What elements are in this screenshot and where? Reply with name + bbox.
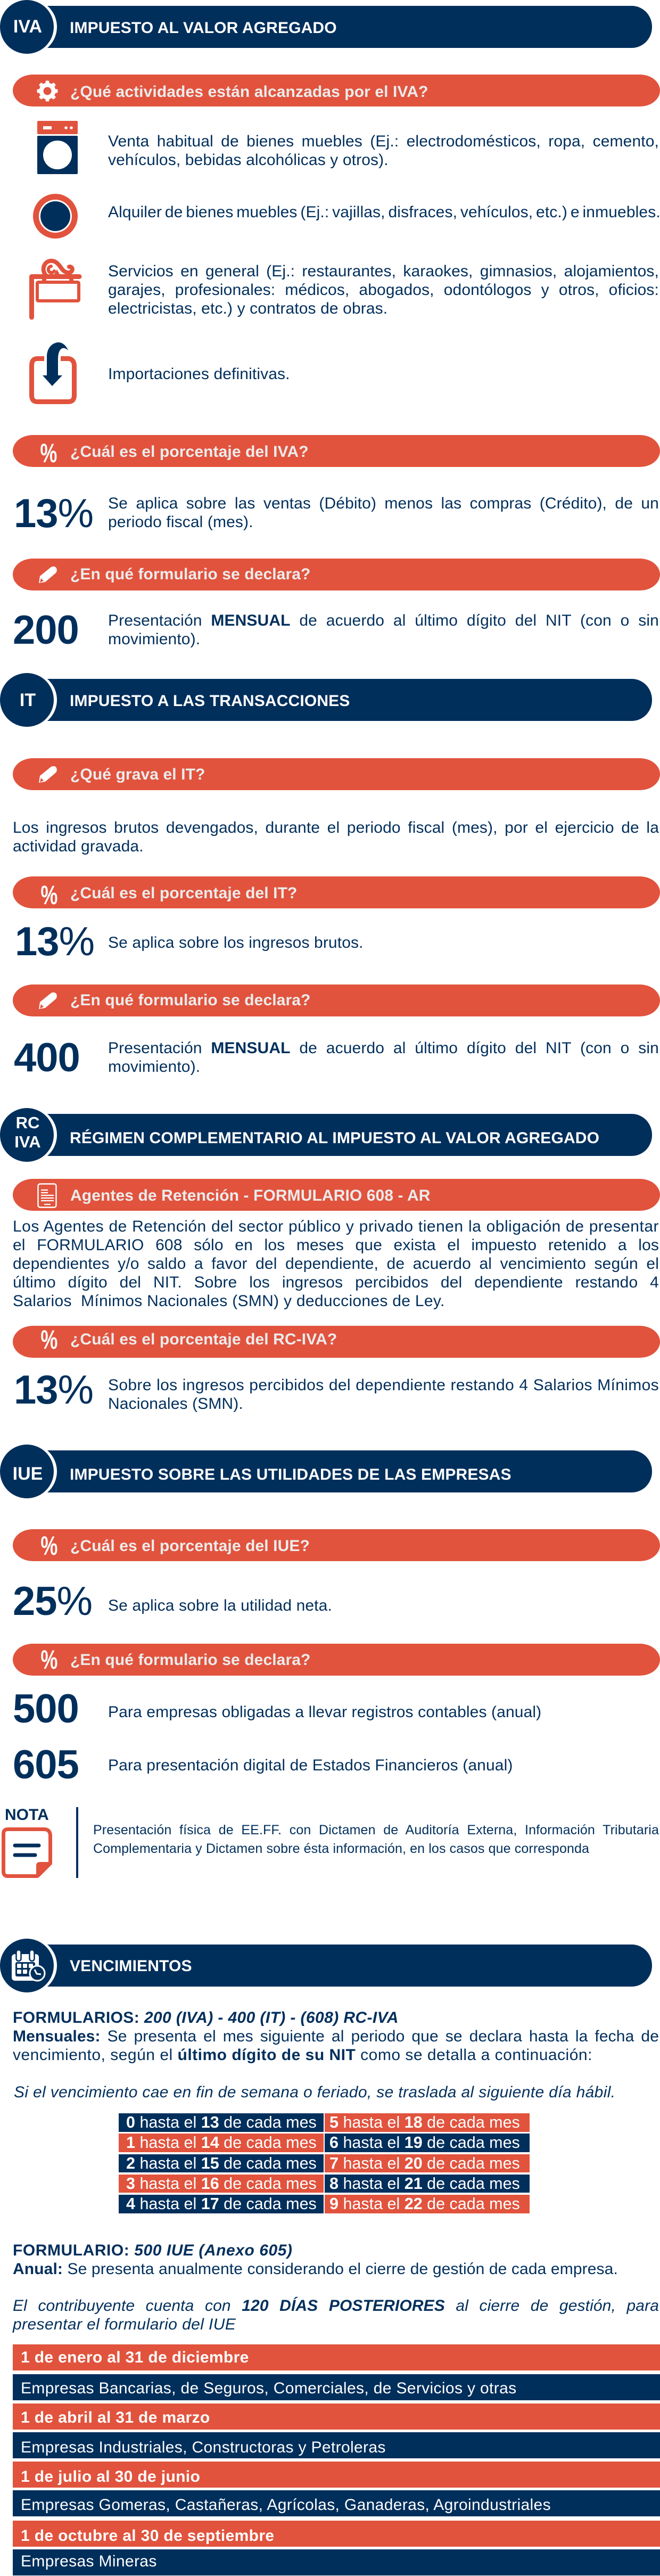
pill text: ¿Cuál es el porcentaje del IUE? (70, 1537, 310, 1555)
pill text: ¿En qué formulario se declara? (70, 1651, 310, 1669)
text: servicios en general: garajes, profesionales: médicos, abogados, odontólogos y otros, oficios: (108, 281, 659, 299)
text: sobre ingresos percibidos: Sobre los ingresos percibidos del dependiente restando 4 Salarios Mínimos (108, 1376, 659, 1394)
pill text: ¿Cuál es el porcentaje del IVA? (70, 443, 309, 461)
figure: 500: 500 (13, 1686, 79, 1732)
table: ultimo digito del NIT: 1 hasta el 14 de cada mes (126, 2134, 317, 2152)
text: 120 dias posteriores (13, 2296, 659, 2334)
table: ultimo digito del NIT: 0 hasta el 13 de cada mes (126, 2113, 317, 2131)
text: nota: Complementaria y Dictamen sobre ésta información, en los casos que corresponda (93, 1841, 589, 1856)
pill heading: formulario IUE (13, 1644, 660, 1676)
text: nota: Presentación física de EE.FF. con Dictamen de Auditoría Externa, Información Tributaria (93, 1823, 659, 1837)
text: agentes de retencion: Los Agentes de Retención del sector público y privado tienen la obligación de presentar (13, 1218, 659, 1235)
pill text: ¿Cuál es el porcentaje del IT? (70, 884, 297, 902)
text: form 605: Para presentación digital de Estados Financieros (anual) (108, 1757, 513, 1774)
text: sobre ingresos percibidos: Nacionales (SMN). (108, 1395, 243, 1413)
list: cierres de gestion: 1 de julio al 30 de junio (21, 2468, 200, 2485)
table: ultimo digito del NIT: 7 hasta el 20 de cada mes (329, 2154, 520, 2172)
text: alquiler: Alquiler de bienes muebles (Ej.: vajillas, disfraces, vehículos, etc.) e inmuebles. (108, 203, 660, 221)
heading: Impuesto a las transacciones: IMPUESTO A LAS TRANSACCIONES (70, 692, 350, 710)
figure: 13%: 13% (14, 491, 93, 536)
figure: 200: 200 (13, 608, 79, 653)
figure: 25%: 25% (13, 1579, 92, 1624)
icon: pencil (38, 991, 59, 1010)
text: venta de bienes muebles: Venta habitual de bienes muebles (Ej.: electrodomésticos, ropa, cemento, (108, 133, 659, 150)
list: cierres de gestion: Empresas Mineras (21, 2553, 157, 2570)
header: IUE (0, 1445, 652, 1498)
list: cierres de gestion: 1 de octubre al 30 de septiembre (21, 2527, 274, 2545)
text: venta de bienes muebles (108, 133, 659, 169)
text: importaciones: Importaciones definitivas. (108, 365, 290, 383)
text: agentes de retencion (13, 1217, 659, 1310)
table: ultimo digito del NIT (119, 2113, 529, 2213)
heading: Vencimientos: VENCIMIENTOS (70, 1957, 192, 1975)
icon: hanging sign (29, 259, 82, 319)
pill heading: porcentaje IVA (13, 435, 660, 467)
text: sobre ingresos percibidos (108, 1376, 659, 1413)
badge: IVA: IVA (13, 17, 42, 37)
text: servicios en general (108, 262, 659, 317)
pill text: ¿Cuál es el porcentaje del RC-IVA? (70, 1331, 337, 1348)
text: ingresos brutos: Los ingresos brutos devengados, durante el periodo fiscal (mes), por el ejercicio de la (13, 819, 659, 836)
text: se aplica ventas: Se aplica sobre las ventas (Débito) menos las compras (Crédito), de un (108, 495, 659, 512)
text: venta de bienes muebles: vehículos, bebidas alcohólicas y otros). (108, 151, 389, 169)
pill text: ¿En qué formulario se declara? (70, 991, 310, 1009)
text: agentes de retencion: dependientes y/o saldo a favor del dependiente, de acuerdo al vencimiento según el (13, 1255, 659, 1273)
list: cierres de gestion: Empresas Gomeras, Castañeras, Agrícolas, Ganaderas, Agroindustriales (21, 2496, 551, 2514)
text: formularios mensuales: vencimiento, según el último dígito de su NIT como se detalla a continuación: (13, 2046, 592, 2064)
header: RC-IVA (0, 1108, 652, 1162)
table: ultimo digito del NIT: 2 hasta el 15 de cada mes (126, 2154, 317, 2172)
pill text: Agentes de Retención - FORMULARIO 608 - AR (70, 1187, 430, 1204)
text: presentacion mensual: movimiento). (108, 630, 200, 648)
badge: RC IVA: IVA (14, 1133, 41, 1151)
text: form 500: Para empresas obligadas a llevar registros contables (anual) (108, 1703, 541, 1721)
header: Vencimientos (0, 1939, 652, 1992)
list: cierres de gestion: Empresas Industriales, Constructoras y Petroleras (21, 2439, 386, 2456)
list: cierres de gestion: 1 de abril al 31 de marzo (21, 2409, 210, 2426)
list: cierres de gestion: Empresas Bancarias, de Seguros, Comerciales, de Servicios y otras (21, 2380, 516, 2397)
text: agentes de retencion: Salarios Mínimos Nacionales (SMN) y deducciones de Ley. (13, 1292, 445, 1310)
pill heading: formulario (13, 558, 660, 590)
figure: 13%: 13% (14, 1367, 93, 1413)
text: se aplica ventas (108, 495, 659, 531)
heading: Impuesto al valor agregado: IMPUESTO AL VALOR AGREGADO (70, 19, 337, 37)
table: ultimo digito del NIT: 5 hasta el 18 de cada mes (329, 2113, 520, 2131)
badge: IUE: IUE (13, 1464, 43, 1484)
icon: pencil (39, 766, 57, 783)
table: ultimo digito del NIT: 9 hasta el 22 de cada mes (329, 2195, 520, 2213)
list: cierres de gestion: 1 de enero al 31 de diciembre (21, 2349, 249, 2366)
text: se aplica ingresos: Se aplica sobre los ingresos brutos. (108, 934, 364, 951)
text: ingresos brutos: actividad gravada. (13, 838, 144, 855)
badge: RC IVA (0, 1113, 55, 1152)
badge: RC IVA: RC (16, 1113, 39, 1132)
text: nota (93, 1821, 659, 1858)
icon: document (37, 1183, 57, 1208)
text: ingresos brutos (13, 818, 659, 856)
text: presentacion mensual: movimiento). (108, 1058, 200, 1076)
text: 120 dias posteriores: El contribuyente cuenta con 120 DÍAS POSTERIORES al cierre de gestión, para (13, 2297, 659, 2315)
text: formulario anual: Anual: Se presenta anualmente considerando el cierre de gestión de cada empresa. (13, 2260, 618, 2278)
icon: import box with arrow (29, 342, 77, 404)
text: nota feriado: Si el vencimiento cae en fin de semana o feriado, se traslada al siguiente día hábil. (14, 2083, 615, 2101)
text: agentes de retencion: último dígito del NIT. Sobre los ingresos percibidos del dependiente restando 4 (13, 1274, 659, 1291)
text: presentacion mensual: Presentación MENSUAL de acuerdo al último dígito del NIT (con o sin (108, 612, 659, 629)
text: se aplica ventas: periodo fiscal (mes). (108, 513, 253, 531)
text: formulario anual: FORMULARIO: 500 IUE (Anexo 605) (13, 2242, 292, 2259)
table: ultimo digito del NIT: 3 hasta el 16 de cada mes (126, 2175, 317, 2193)
text: servicios en general: electricistas, etc.) y contratos de obras. (108, 300, 387, 317)
text: presentacion mensual: Presentación MENSUAL de acuerdo al último dígito del NIT (con o sin (108, 1039, 659, 1057)
label: NOTA: NOTA (5, 1806, 49, 1824)
text: formularios mensuales: FORMULARIOS: 200 (IVA) - 400 (IT) - (608) RC-IVA (13, 2009, 399, 2027)
figure: 605: 605 (13, 1742, 79, 1787)
table: ultimo digito del NIT: 6 hasta el 19 de cada mes (329, 2134, 520, 2152)
figure: 400: 400 (14, 1035, 80, 1080)
pill heading: que grava (13, 758, 660, 790)
badge: IT: IT (20, 690, 36, 710)
icon: calendar with clock (10, 1947, 48, 1986)
text: formularios mensuales: Mensuales: Se presenta el mes siguiente al periodo que se declara hasta la fecha de (13, 2028, 659, 2045)
text: 120 dias posteriores: presentar el formulario del IUE (13, 2316, 236, 2333)
pill heading: agentes de retencion (13, 1179, 660, 1211)
icon: washing machine (37, 121, 78, 174)
text: formulario anual (13, 2241, 659, 2278)
pill text: ¿Qué grava el IT? (70, 766, 205, 783)
pill text: ¿En qué formulario se declara? (70, 565, 310, 583)
icon: gear (37, 81, 57, 101)
pill heading: actividades alcanzadas (13, 75, 660, 106)
header: IVA (0, 0, 652, 54)
heading: Impuesto sobre utilidades: IMPUESTO SOBRE LAS UTILIDADES DE LAS EMPRESAS (70, 1466, 512, 1483)
table: ultimo digito del NIT: 4 hasta el 17 de cada mes (126, 2195, 317, 2213)
icon: ring (33, 194, 78, 239)
header: IT (0, 673, 652, 727)
figure: 13%: 13% (15, 919, 94, 964)
pill heading: porcentaje IT (13, 876, 660, 908)
text: presentacion mensual (108, 612, 659, 648)
text: formularios mensuales (13, 2008, 659, 2064)
heading: Regimen complementario: RÉGIMEN COMPLEMENTARIO AL IMPUESTO AL VALOR AGREGADO (70, 1129, 599, 1147)
text: agentes de retencion: el FORMULARIO 608 sólo en los meses que exista el impuesto retenido a los (13, 1236, 659, 1254)
pill heading: formulario (13, 984, 660, 1016)
pill heading: porcentaje RC-IVA (13, 1326, 660, 1358)
text: servicios en general: Servicios en general (Ej.: restaurantes, karaokes, gimnasios, alojamientos, (108, 262, 659, 280)
icon: note (0, 1826, 54, 1880)
text: utilidad neta: Se aplica sobre la utilidad neta. (108, 1597, 332, 1614)
pill heading: porcentaje IUE (13, 1529, 660, 1561)
pill text: ¿Qué actividades están alcanzadas por el IVA? (70, 83, 428, 101)
text: presentacion mensual (108, 1039, 659, 1076)
list: cierres de gestion (0, 2344, 660, 2576)
table: ultimo digito del NIT: 8 hasta el 21 de cada mes (329, 2175, 520, 2193)
icon: pencil (39, 567, 57, 583)
